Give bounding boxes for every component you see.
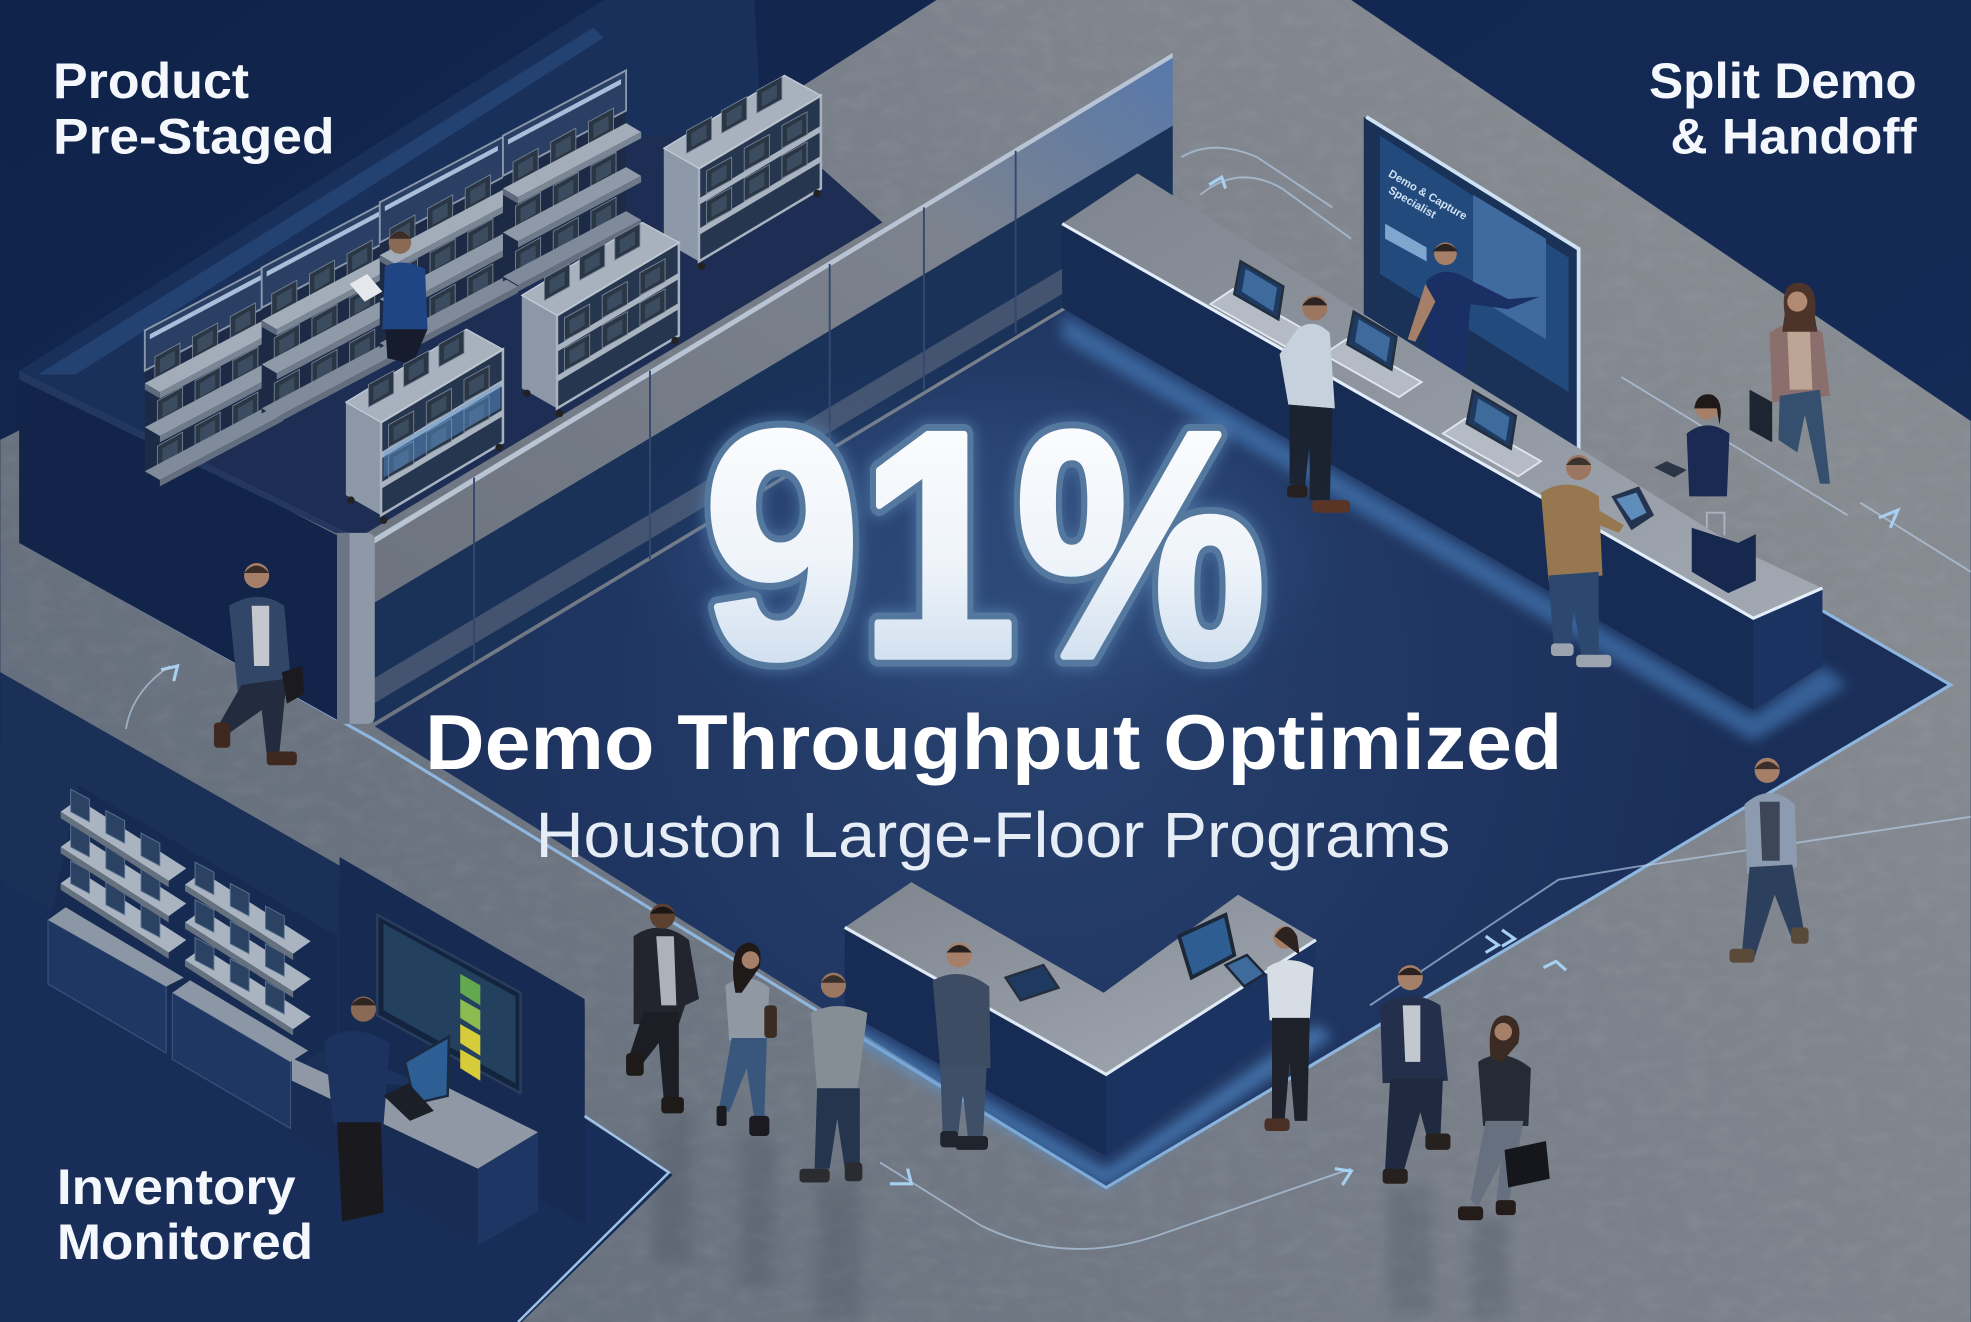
shelf backing [48,785,337,1068]
cart: middle [522,222,679,417]
person: man in gray jacket [1729,758,1809,963]
cart: back [664,75,821,270]
tablet held [1226,955,1264,986]
inventory counter [292,1058,538,1245]
panel: split demo counter: Specialist [1386,184,1438,221]
person: inventory operator [324,997,410,1221]
counter front right [1106,940,1316,1156]
title: 91% big stat: 91% [704,366,1266,725]
label: split demo and handoff: & Handoff [1670,108,1917,164]
person: man in navy suit [1380,965,1450,1184]
person: customer at counter [1280,295,1350,513]
shelf unit left [61,789,186,959]
cart: front with products [346,329,503,524]
counter top [1062,173,1822,618]
panel: center low wall [337,53,1173,724]
person: man in tan jacket [1541,455,1654,667]
display wall [1364,117,1579,450]
panel: inventory monitored area [0,672,673,1322]
person: man in gray suit at counter [933,942,991,1150]
shelving bank 3 [380,137,518,358]
floor edge light [23,543,1951,1188]
label: product pre-staged: Product [53,53,249,109]
shelving bank 2 [262,202,400,423]
icon: floor arrows [161,177,1898,1185]
panel: L-shaped demo counter [845,882,1332,1188]
floor route lines [126,148,1971,1249]
inventory floor [0,880,673,1322]
person: presenter [1408,243,1540,374]
person: man in gray sweater [800,973,867,1183]
room floor [139,119,882,538]
person: suited man walking left aisle [214,563,304,765]
shelving bank 4 [503,70,641,292]
panel: split demo counter [1062,117,1848,741]
subheading: houston large-floor programs: Houston Large-Floor Programs [536,799,1450,871]
floor reflections under people [654,1112,1508,1319]
counter top [845,882,1316,1074]
panel: central demo floor [23,308,1951,1188]
panel: product pre-staged room [19,0,882,723]
counter glow [845,1018,1332,1188]
title: 91% big stat: 91% [704,366,1266,725]
pillar [337,533,375,724]
heading: demo throughput optimized: Demo Throughput Optimized [425,698,1562,786]
title: 91% big stat: 91% [704,366,1266,725]
outer left wall [19,371,342,723]
label: product pre-staged: Pre-Staged [53,108,335,164]
back wall [19,0,761,465]
person: woman with briefcase [1458,1015,1550,1220]
person: woman in white top [1264,926,1313,1131]
tablet left [1006,965,1058,1000]
person: man in dark suit [626,904,699,1113]
person: staff with tablet [1654,394,1729,496]
tablet right [1179,915,1234,978]
inventory tablet [405,1037,449,1103]
person: worker with clipboard [350,231,428,364]
tablet station 2 [1324,312,1422,397]
shelf unit right [185,862,311,1035]
screen [1380,136,1569,392]
screen text: Demo & Capture [1386,168,1469,223]
inventory dashboard monitor [377,915,521,1093]
shopping bag [1692,513,1756,593]
counter front [1062,224,1753,710]
counter glow [1062,314,1848,741]
label: inventory monitored: Monitored [57,1214,313,1270]
person: woman in gray top [717,942,777,1136]
tablet station 3 [1443,391,1541,476]
inventory room wall [0,672,585,1232]
label: split demo and handoff: Split Demo [1649,53,1917,109]
tablet station 1 [1210,261,1308,347]
glow [673,408,1301,697]
keyboard [384,1083,434,1121]
shelving bank 1 [145,265,283,486]
person: woman with jacket and bag [1750,283,1830,484]
label: inventory monitored: Inventory [57,1159,296,1215]
counter front left [845,927,1106,1156]
cabinet left [48,907,184,1053]
cabinet right [172,980,308,1128]
